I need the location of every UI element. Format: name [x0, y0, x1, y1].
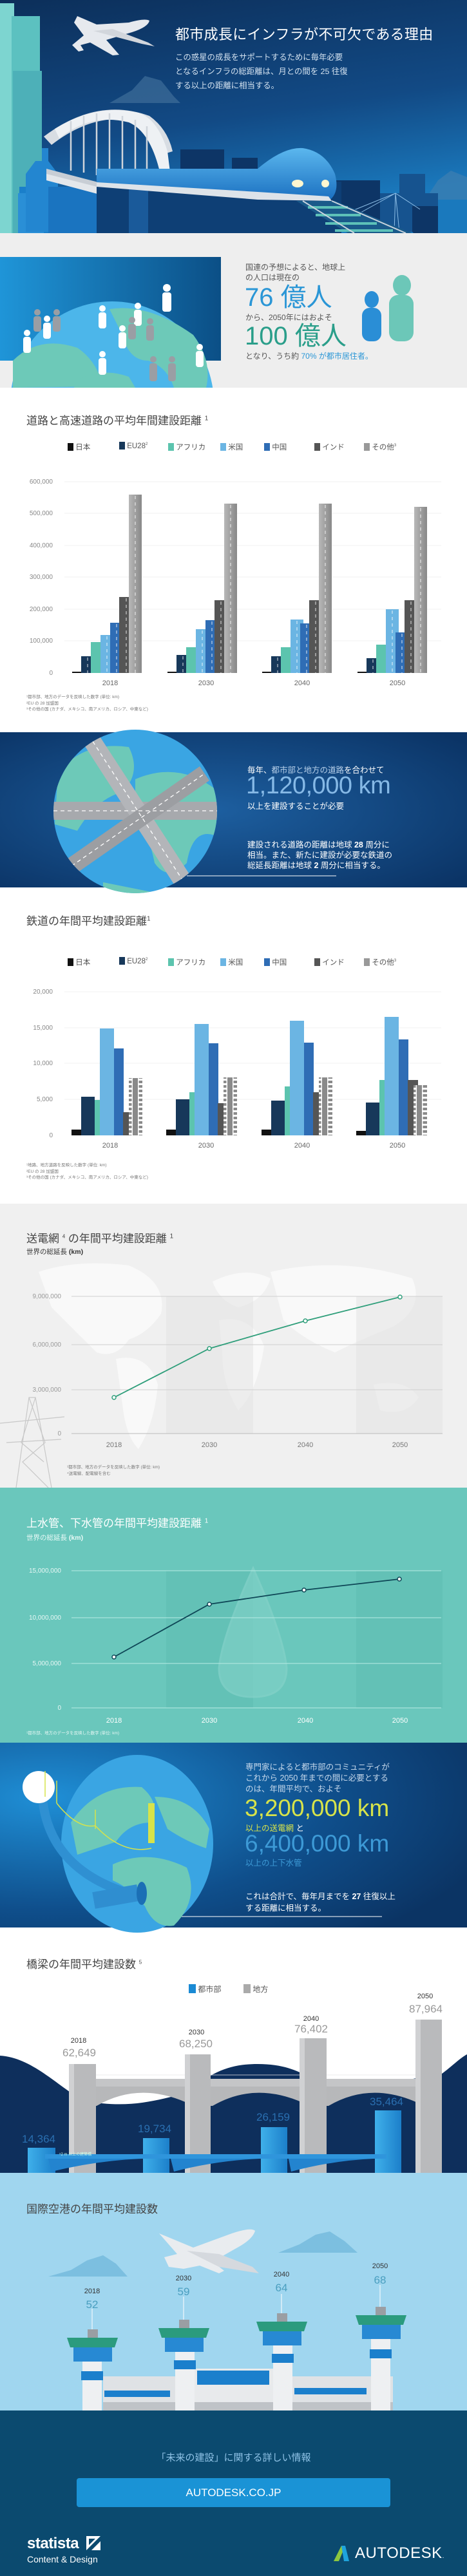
panel: water pipes: ¹都市部、地方のデータを反映した数字 (単位: km) — [26, 1731, 119, 1736]
icon: people — [362, 275, 414, 341]
panel: road callout: 総延長距離は地球 2 周分に相当する。 — [247, 861, 385, 870]
bar chart: roads: 400,000 — [30, 542, 53, 549]
chart: bridges: 26,159 — [256, 2111, 290, 2123]
logo: statista: statista — [27, 2535, 79, 2552]
panel: water pipes: 2050 — [392, 1717, 408, 1725]
panel: airports: 52 — [86, 2298, 98, 2311]
bar chart: roads: 2018 — [102, 679, 118, 687]
panel: airports: 2040 — [274, 2271, 289, 2278]
legend: road: その他3 — [372, 444, 396, 451]
subtitle text: となるインフラの総距離は、月との間を 25 往復 — [175, 67, 348, 76]
panel: water pipes: 2040 — [298, 1717, 313, 1725]
footnotes: rail: ³その他の国 (カナダ、メキシコ、南アメリカ、ロシア、中東など) — [26, 1175, 148, 1180]
panel: airports: 2018 — [84, 2287, 100, 2295]
footnotes: roads: ²EU の 28 加盟国 — [26, 701, 59, 706]
panel: power grid: 6,000,000 — [32, 1341, 61, 1349]
logo: autodesk: AUTODESK. — [355, 2544, 444, 2562]
legend: road: EU282 — [127, 442, 148, 450]
panel: pipes callout: 6,400,000 km — [245, 1830, 389, 1857]
chart: bridges: 68,250 — [179, 2038, 213, 2050]
chart: bridges — [0, 1993, 467, 2173]
footnotes: rail — [26, 1163, 148, 1180]
legend: rail: EU282 — [127, 958, 148, 965]
bar chart: rail: 2030 — [198, 1142, 214, 1150]
bar chart: roads: 100,000 — [30, 638, 53, 645]
legend: rail: アフリカ — [176, 959, 205, 967]
panel: power grid: 2030 — [202, 1441, 217, 1449]
chart: bridges: 14,364 — [22, 2133, 55, 2145]
panel: population: となり、うち約 70% が都市居住者。 — [245, 352, 373, 361]
world map backdrop — [39, 1264, 419, 1449]
panel: road callout: 以上を建設することが必要 — [247, 802, 344, 811]
panel: road callout: 1,120,000 km — [246, 772, 390, 799]
chart: bridges: ⁵2 m 以上の建築橋 — [59, 2152, 91, 2157]
panel: water pipes: 世界の総延長 (km) — [26, 1534, 83, 1542]
panel: power grid: 9,000,000 — [32, 1293, 61, 1300]
pipes text — [245, 1763, 390, 1794]
chart: bridges: 87,964 — [409, 2003, 443, 2015]
population text: の人口は現在の — [245, 273, 300, 282]
panel: airports: 2050 — [372, 2262, 388, 2270]
legend: road: 日本 — [75, 444, 90, 451]
legend: rail: 米国 — [228, 959, 243, 967]
panel: water pipes: 2018 — [106, 1717, 122, 1725]
icon: pylon — [0, 1397, 64, 1488]
line chart: power — [112, 1295, 402, 1399]
chart: bridges: 2030 — [189, 2029, 204, 2036]
panel: pipes callout: 以上の上下水管 — [245, 1859, 302, 1868]
panel: road callout: 建設される道路の距離は地球 28 周分に — [247, 840, 390, 849]
callout text: 毎年、都市部と地方の道路を合わせて — [247, 766, 385, 775]
legend: road: 中国 — [272, 444, 287, 451]
subtitle text — [175, 53, 348, 90]
legend: rail: 中国 — [272, 959, 287, 967]
panel: pipes callout — [0, 1743, 467, 1933]
chart: bridges: 76,402 — [294, 2023, 328, 2035]
footnotes: roads — [26, 694, 148, 712]
legend: road — [68, 442, 396, 451]
bar chart: rail: 2040 — [294, 1142, 310, 1150]
logo: statista: Content & Design — [27, 2554, 98, 2564]
bar chart: roads — [30, 478, 441, 687]
bar chart: rail: 20,000 — [33, 989, 53, 996]
pipes text: 専門家によると都市部のコミュニティが — [245, 1763, 390, 1772]
button — [77, 2478, 390, 2507]
panel: water pipes — [0, 1488, 467, 1743]
panel: power grid: 2050 — [392, 1441, 408, 1449]
panel: population — [0, 233, 467, 388]
panel: pipes callout: する距離に相当する。 — [245, 1904, 326, 1913]
panel: water pipes: 10,000,000 — [29, 1615, 61, 1622]
plane — [72, 16, 155, 55]
chart: bridges: 2018 — [71, 2037, 86, 2045]
heading: road chart: 道路と高速道路の平均年間建設距離 1 — [26, 415, 208, 427]
panel: water pipes: 5,000,000 — [32, 1660, 61, 1667]
line chart: water — [112, 1577, 401, 1659]
panel: population: 76 億人 — [245, 283, 332, 312]
panel: water pipes: 2030 — [202, 1717, 217, 1725]
panel: population: 100 億人 — [245, 322, 347, 350]
arch bridge — [44, 109, 254, 233]
footnotes: rail: ²EU の 28 加盟国 — [26, 1170, 59, 1173]
bar chart: rail: 2018 — [102, 1142, 118, 1150]
legend: road: 米国 — [228, 444, 243, 451]
logo: statista — [27, 2535, 100, 2564]
chart: bridges: 62,649 — [62, 2047, 96, 2059]
panel: power grid: 2018 — [106, 1441, 122, 1449]
panel: pipes callout: これは合計で、毎年月までを 27 往復以上 — [245, 1892, 396, 1901]
bar chart: roads: 2030 — [198, 679, 214, 687]
globe with crossing roads — [53, 730, 219, 898]
icon: plane — [159, 2230, 259, 2273]
legend: road: アフリカ — [176, 444, 205, 451]
panel: airports: 59 — [178, 2286, 189, 2298]
panel: airports: 64 — [276, 2282, 287, 2294]
panel: water pipes: 0 — [57, 1705, 61, 1712]
bar chart: roads: 200,000 — [30, 606, 53, 613]
chart: bridges: 2040 — [303, 2015, 319, 2023]
panel: power grid: 0 — [57, 1430, 61, 1437]
teal tower — [0, 3, 14, 233]
towers — [67, 2285, 406, 2410]
skyline dark — [180, 149, 380, 232]
chart: bridges: 2050 — [417, 1993, 433, 2000]
panel: population: から、2050年にはおよそ — [245, 313, 332, 322]
button: AUTODESK.CO.JP — [186, 2486, 281, 2499]
panel: water pipes: 15,000,000 — [29, 1567, 61, 1575]
gray bridge — [84, 2079, 442, 2106]
panel: pipes callout: 以上の送電網 と — [245, 1824, 304, 1833]
bar chart: rail: 10,000 — [33, 1060, 53, 1067]
bar chart: rail: 0 — [49, 1132, 53, 1139]
tracks — [296, 201, 412, 233]
panel: power grid: 世界の総延長 (km) — [26, 1248, 83, 1256]
bar chart: rail: 15,000 — [33, 1025, 53, 1032]
legend: rail: インド — [322, 959, 345, 967]
population text — [245, 263, 345, 282]
panel: airports: 2030 — [176, 2275, 191, 2282]
globe with people — [12, 284, 213, 388]
heading: airports: 国際空港の年間平均建設数 — [26, 2203, 158, 2215]
legend: bridges: 地方 — [253, 1985, 268, 1994]
legend: bridges — [189, 1984, 268, 1994]
legend: rail: 日本 — [75, 959, 90, 967]
legend: rail — [68, 957, 396, 967]
panel: road callout — [0, 730, 467, 893]
header section — [0, 0, 467, 233]
crane — [348, 193, 420, 232]
panel: airports: 68 — [374, 2274, 386, 2286]
bar chart: roads: 600,000 — [30, 478, 53, 486]
panel: power grid: 3,000,000 — [32, 1387, 61, 1394]
footnotes: rail: ¹地路、地方道路を反映した数字 (単位: km) — [26, 1163, 107, 1168]
panel: power grid: ⁴送電線、配電線を含む — [67, 1471, 111, 1476]
bar chart: roads: 2040 — [294, 679, 310, 687]
clouds — [48, 2255, 128, 2277]
legend: road: インド — [322, 444, 345, 451]
bar chart: rail: 5,000 — [37, 1096, 53, 1103]
panel: airports — [0, 2173, 467, 2410]
bar chart: roads: 0 — [49, 670, 53, 677]
population text: 国連の予想によると、地球上 — [245, 263, 345, 272]
bar chart: rail: 2050 — [390, 1142, 405, 1150]
bar chart: roads: 300,000 — [30, 574, 53, 581]
pipes text: これから 2050 年までの間に必要とする — [245, 1774, 388, 1783]
footnotes: roads: ¹都市部、地方のデータを反映した数字 (単位: km) — [26, 695, 119, 699]
footer text: 「未来の建設」に関する詳しい情報 — [156, 2452, 310, 2463]
urban bars — [28, 2110, 401, 2173]
title: 都市成長にインフラが不可欠である理由 — [175, 26, 434, 43]
subtitle text: する以上の距離に相当する。 — [175, 81, 279, 90]
panel: power grid: ¹都市部、地方のデータを反映した数字 (単位: km) — [67, 1465, 160, 1470]
pillars — [69, 2020, 442, 2173]
chart: bridges: 35,464 — [370, 2096, 403, 2108]
legend: rail: その他3 — [372, 959, 396, 967]
blue buildings — [19, 187, 71, 233]
footer — [0, 2410, 467, 2576]
pipes text: のは、年間平均で、およそ — [245, 1785, 342, 1794]
bar chart: roads: 500,000 — [30, 510, 53, 517]
globe with pipes — [23, 1755, 213, 1933]
rail viaduct — [97, 173, 341, 193]
panel: pipes callout: 3,200,000 km — [245, 1795, 389, 1821]
clouds — [110, 76, 180, 103]
bar chart: rail — [33, 989, 441, 1150]
heading: rail chart: 鉄道の年間平均建設距離1 — [26, 915, 151, 927]
icon: water drop — [219, 1568, 287, 1697]
terminal — [103, 2369, 393, 2410]
subtitle text: この惑星の成長をサポートするために毎年必要 — [175, 53, 343, 62]
panel: power grid — [0, 1204, 467, 1488]
heading: water: 上水管、下水管の年間平均建設距離 1 — [26, 1517, 208, 1530]
heading: bridges: 橋梁の年間平均建設数 5 — [26, 1958, 142, 1971]
footnotes: roads: ³その他の国 (カナダ、メキシコ、南アメリカ、ロシア、中東など) — [26, 707, 148, 712]
legend: bridges: 都市部 — [198, 1985, 221, 1994]
train — [97, 148, 336, 201]
panel: road callout: 相当。また、新たに建設が必要な鉄道の — [247, 851, 392, 860]
panel: power grid: 2040 — [298, 1441, 313, 1449]
heading: power: 送電網 4 の年間平均建設距離 1 — [26, 1233, 173, 1245]
chart: bridges: 19,734 — [138, 2123, 171, 2135]
bar chart: roads: 2050 — [390, 679, 405, 687]
